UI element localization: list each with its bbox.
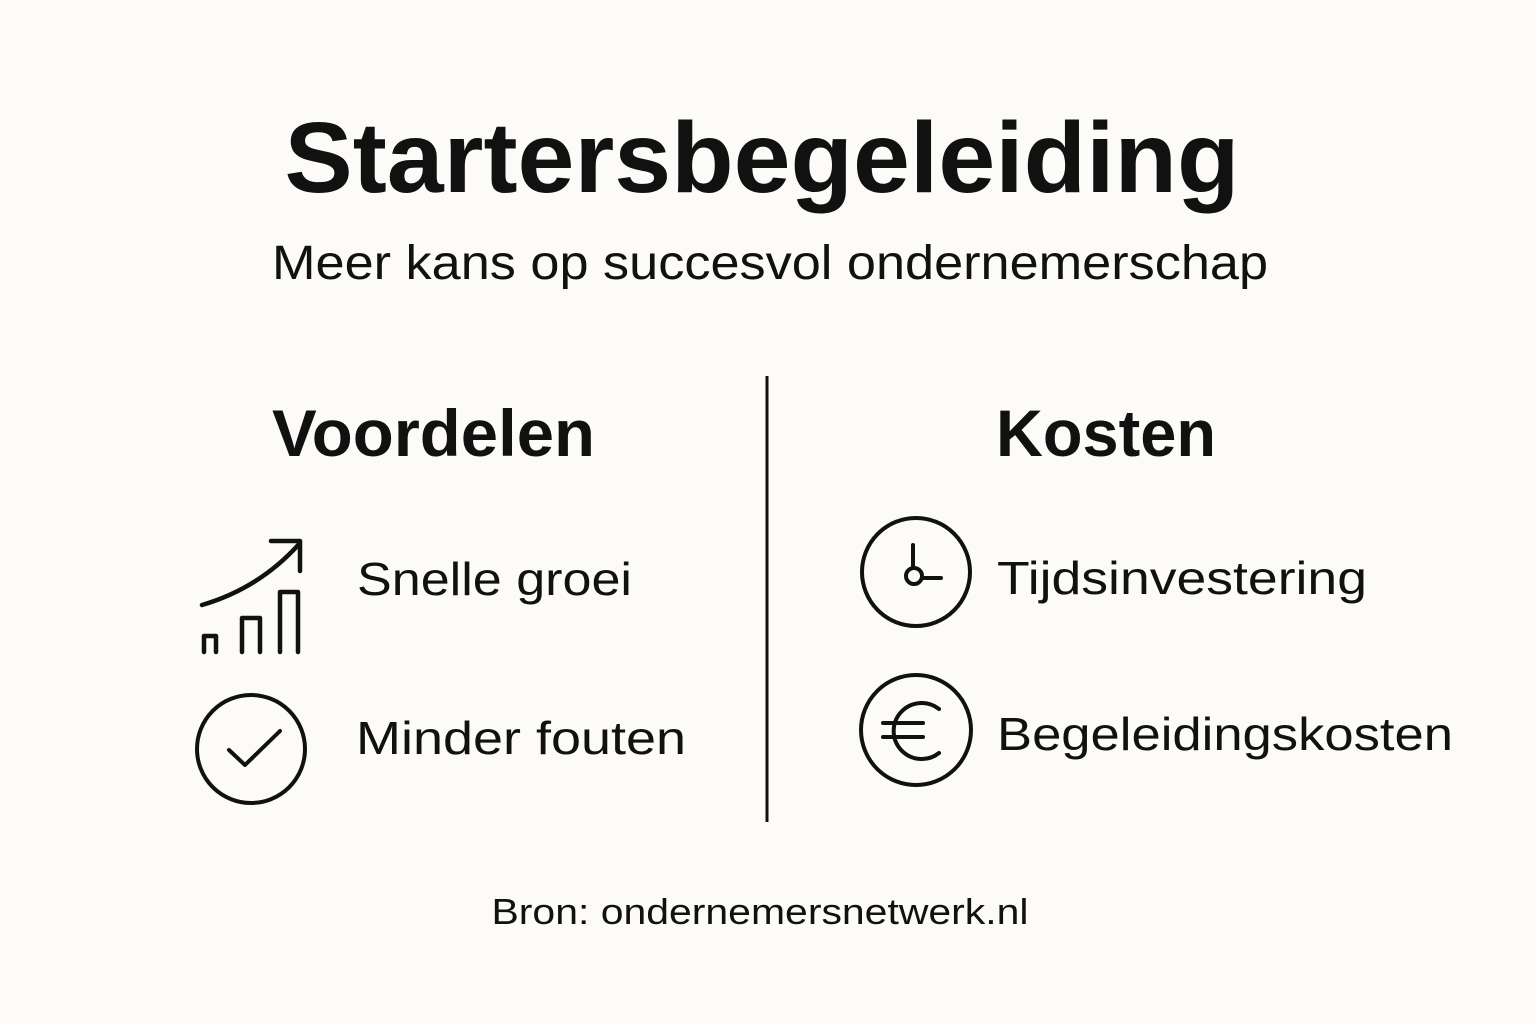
title: Startersbegeleiding (284, 102, 1240, 214)
panel: voordelen (197, 396, 686, 803)
panel: kosten (861, 396, 1453, 785)
source: Bron: ondernemersnetwerk.nl (492, 891, 1028, 932)
text: Begeleidingskosten: Begeleidingskosten (997, 708, 1453, 760)
heading: Voordelen: Voordelen (272, 396, 595, 470)
icon: euro (861, 675, 971, 785)
heading: Kosten: Kosten (996, 396, 1216, 470)
text: Tijdsinvestering: Tijdsinvestering (997, 552, 1367, 604)
text: Minder fouten: Minder fouten (356, 712, 686, 764)
icon: check circle (197, 695, 305, 803)
text: Snelle groei: Snelle groei (357, 553, 632, 605)
icon: growth chart (202, 541, 300, 652)
subtitle: Meer kans op succesvol ondernemerschap (272, 237, 1268, 290)
icon: clock (862, 518, 970, 626)
